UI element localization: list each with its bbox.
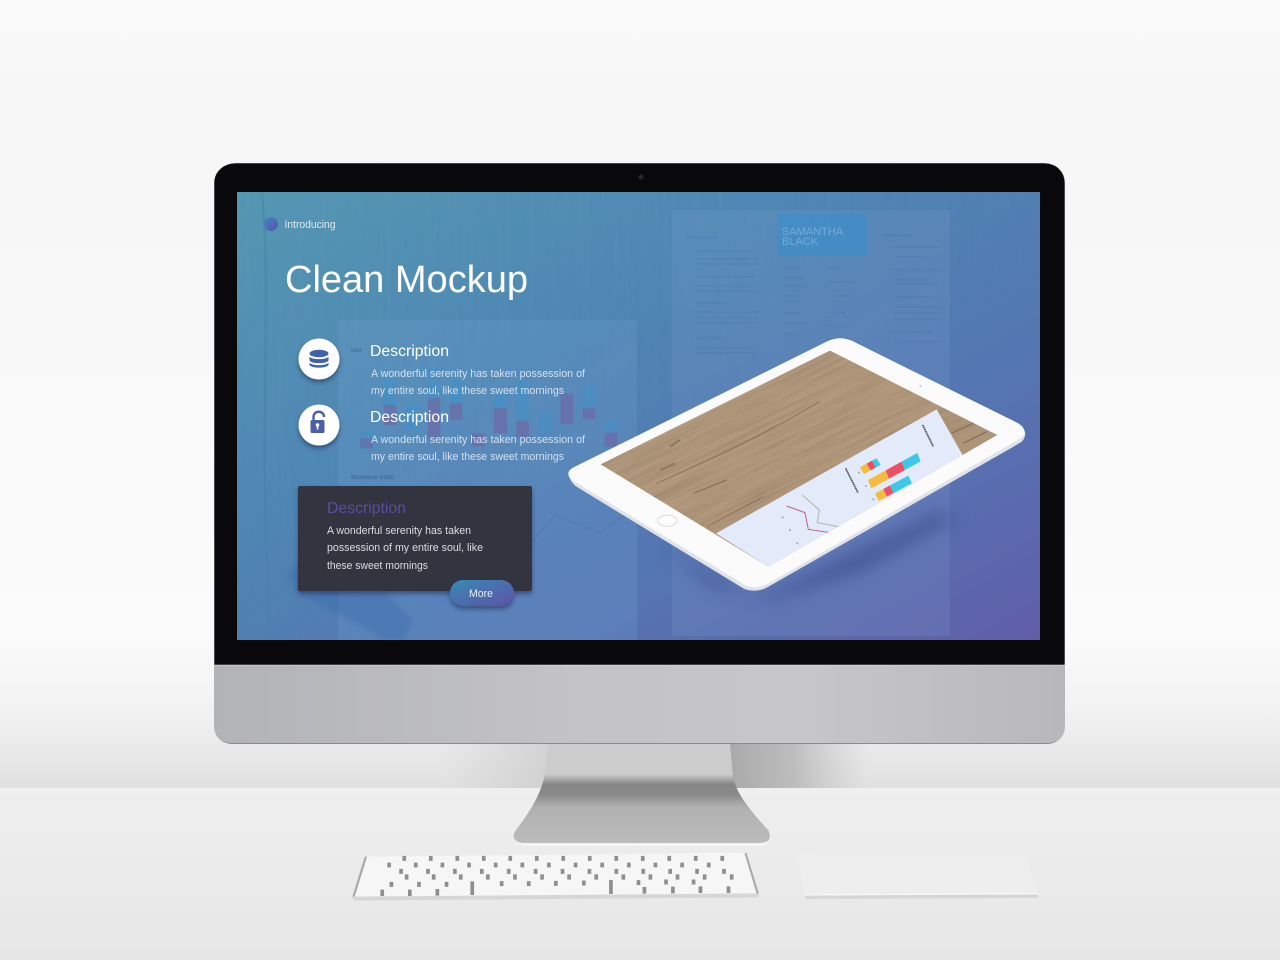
stacked bars: [860, 453, 921, 501]
body text: my entire soul, like these sweet mornings: [371, 451, 564, 463]
chart labels: [846, 425, 933, 493]
icon: database: [298, 338, 340, 380]
tablet: [568, 338, 1026, 600]
faded resume page: [672, 210, 950, 636]
feature item: lock: [298, 404, 586, 463]
body text: [371, 368, 586, 397]
line chart: [787, 495, 838, 532]
camera: [919, 385, 921, 387]
callout text: A wonderful serenity has taken: [327, 525, 471, 537]
tablet wood screen: [601, 351, 997, 567]
button: more: More: [469, 588, 493, 600]
home button: [658, 515, 677, 526]
small gradient dot: [264, 217, 278, 231]
faded chart page: [338, 320, 640, 640]
body text: A wonderful serenity has taken possession of: [371, 434, 586, 446]
title: Clean Mockup: [285, 259, 528, 301]
faded chart page: Our: [351, 348, 362, 354]
button: more: [450, 580, 514, 606]
body text: my entire soul, like these sweet mornings: [371, 385, 564, 397]
heading: Description: [370, 409, 449, 426]
monitor stand: [513, 744, 771, 846]
body text: [371, 434, 586, 463]
screen: [237, 192, 1040, 640]
webcam: [638, 174, 644, 180]
faded line chart: [470, 514, 624, 612]
tablet body: [568, 338, 1025, 591]
keyboard: [352, 853, 759, 901]
icon: open lock: [298, 404, 340, 446]
trackpad: [797, 852, 1038, 899]
callout text: [327, 525, 483, 572]
tablet shadow: [660, 513, 960, 600]
monitor chin: [214, 660, 1065, 744]
wood grain background: [261, 192, 266, 425]
faded resume page: BLACK: [782, 236, 819, 248]
faded resume page: SAMANTHA: [782, 226, 844, 238]
tablet paper chart sheet: [716, 409, 963, 567]
keyboard and trackpad: [352, 852, 1038, 901]
faded chart page: Business Stats: [351, 475, 395, 481]
monitor bezel: [214, 163, 1065, 665]
callout text: these sweet mornings: [327, 560, 428, 572]
faded hand with watch: [290, 570, 410, 640]
dark callout card: [298, 486, 532, 606]
label: introducing: Introducing: [284, 219, 336, 231]
heading: Description: [370, 343, 449, 360]
feature item: database: [298, 338, 586, 397]
monitor: [214, 163, 1065, 744]
body text: A wonderful serenity has taken possession of: [371, 368, 586, 380]
faded bars: [360, 368, 617, 448]
callout text: possession of my entire soul, like: [327, 542, 483, 554]
callout heading: Description: [327, 500, 406, 517]
